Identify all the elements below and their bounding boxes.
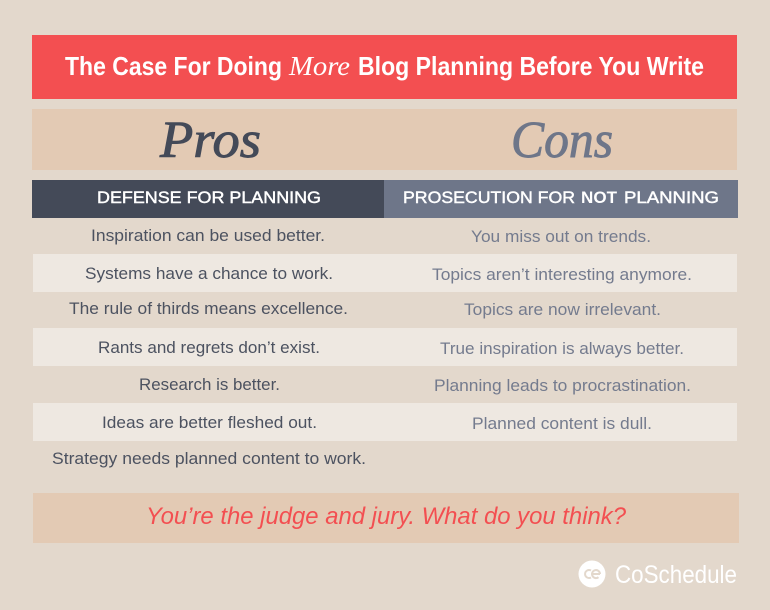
column header: prosecution: PROSECUTION FOR xyxy=(403,188,575,207)
pros list: Rants and regrets don’t exist. xyxy=(98,338,320,357)
cons list: Topics aren’t interesting anymore. xyxy=(432,265,692,284)
cons list: True inspiration is always better. xyxy=(440,339,684,358)
pros and cons heading band xyxy=(32,109,737,170)
call to action band: You’re the judge and jury. What do you think? xyxy=(146,503,627,530)
cons list: Planning leads to procrastination. xyxy=(434,376,691,395)
pros list xyxy=(52,226,366,468)
column header: prosecution: PLANNING xyxy=(624,188,719,207)
cons list xyxy=(432,227,692,433)
cons list: Topics are now irrelevant. xyxy=(464,300,661,319)
column header: defense xyxy=(32,180,384,218)
pros list: Research is better. xyxy=(139,375,280,394)
CoSchedule logo: CoSchedule xyxy=(615,561,737,589)
title banner: Blog Planning Before You Write xyxy=(358,51,704,81)
row stripes xyxy=(33,254,737,441)
CoSchedule logo xyxy=(578,560,737,589)
title banner: The Case For Doing xyxy=(65,51,282,81)
title banner: More xyxy=(288,51,350,81)
pros list: Inspiration can be used better. xyxy=(91,226,325,245)
pros list: Systems have a chance to work. xyxy=(85,264,333,283)
column header: prosecution xyxy=(384,180,738,218)
call to action band xyxy=(33,493,739,543)
pros list: The rule of thirds means excellence. xyxy=(69,299,348,318)
cons list: You miss out on trends. xyxy=(471,227,651,246)
pros list: Ideas are better fleshed out. xyxy=(102,413,317,432)
column header: defense: DEFENSE FOR PLANNING xyxy=(97,188,321,207)
pros list: Strategy needs planned content to work. xyxy=(52,449,366,468)
cons list: Planned content is dull. xyxy=(472,414,652,433)
column header: prosecution: NOT xyxy=(581,188,618,207)
pros and cons heading band: Cons xyxy=(511,112,613,169)
pros and cons heading band: Pros xyxy=(159,112,261,169)
title banner xyxy=(32,35,737,99)
